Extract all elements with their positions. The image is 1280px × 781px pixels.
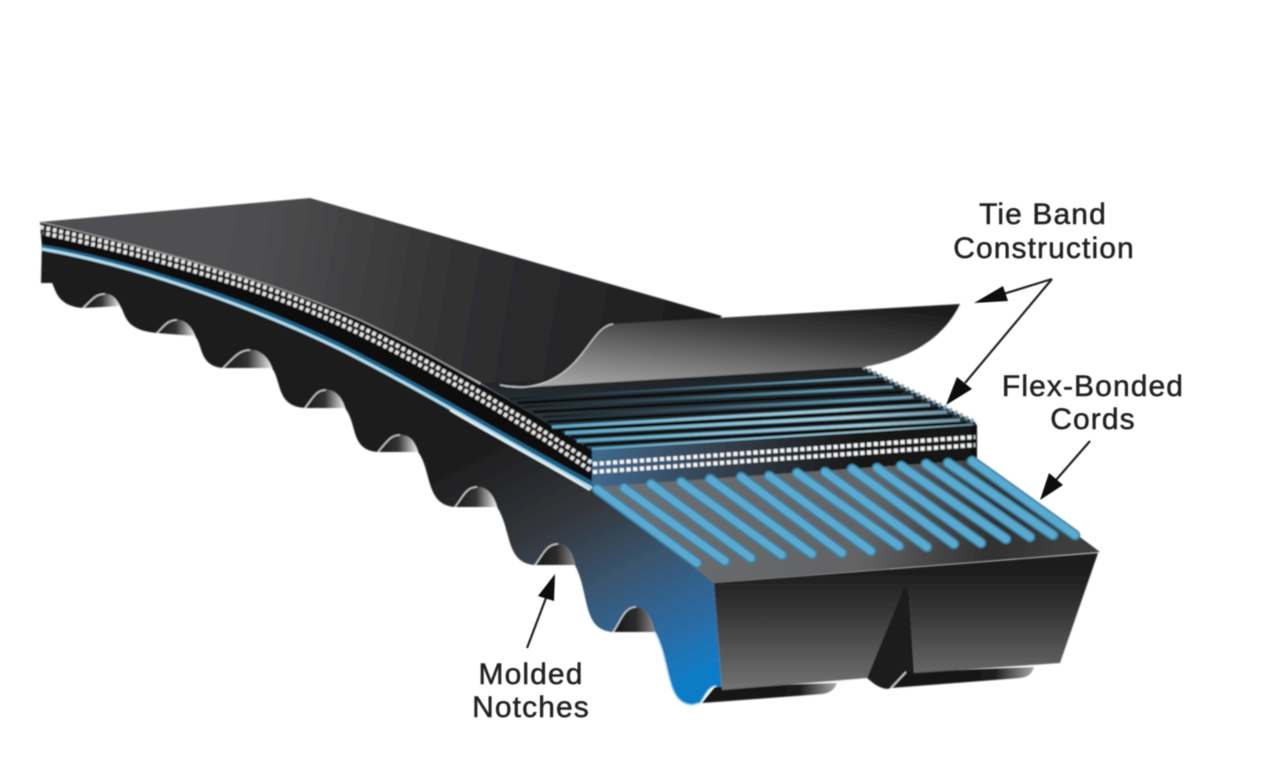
band dots bbox=[593, 437, 975, 472]
tie band edge bbox=[40, 222, 592, 488]
ribbed tie band top bbox=[480, 367, 977, 450]
rib streaks bbox=[510, 377, 973, 449]
label: tie band construction: Tie Band bbox=[979, 198, 1107, 231]
belt illustration bbox=[40, 198, 1100, 705]
side wall with molded notches bbox=[41, 240, 722, 705]
edge highlight bbox=[40, 222, 480, 384]
tie band flap bbox=[500, 304, 960, 387]
label: flex-bonded cords: Cords bbox=[1050, 403, 1136, 436]
flex-bonded cord deck bbox=[592, 460, 1100, 583]
notch highlights bbox=[83, 294, 716, 705]
arrows bbox=[527, 279, 1090, 648]
label: molded notches: Molded bbox=[478, 658, 584, 691]
top surface of belt bbox=[40, 198, 722, 400]
label: tie band construction: Construction bbox=[953, 232, 1135, 265]
notches bbox=[83, 294, 655, 632]
arrow: tie band ribs bbox=[946, 279, 1052, 405]
front cross-section face bbox=[714, 553, 1098, 690]
band front face bbox=[592, 425, 977, 488]
edge cord line bbox=[42, 247, 592, 490]
right foot underside bbox=[891, 667, 1034, 688]
flex-bonded cords bbox=[597, 461, 1075, 563]
rib serrated edge bbox=[863, 367, 975, 422]
label: tie band construction bbox=[953, 198, 1135, 265]
centre groove bbox=[867, 586, 914, 689]
label: flex-bonded cords: Flex-Bonded bbox=[1002, 370, 1184, 403]
arrow: molded notches bbox=[527, 574, 555, 648]
rib streak shadows bbox=[517, 382, 966, 445]
edge dots bbox=[40, 227, 592, 470]
label: flex-bonded cords bbox=[1002, 370, 1184, 436]
left foot underside bbox=[702, 683, 837, 703]
groove highlight bbox=[891, 672, 906, 688]
arrow: tie band flap bbox=[974, 279, 1052, 303]
label: molded notches bbox=[472, 658, 590, 724]
label: molded notches: Notches bbox=[472, 691, 590, 724]
arrow: flex-bonded cords bbox=[1040, 441, 1090, 500]
flap bottom-left highlight bbox=[500, 324, 613, 387]
